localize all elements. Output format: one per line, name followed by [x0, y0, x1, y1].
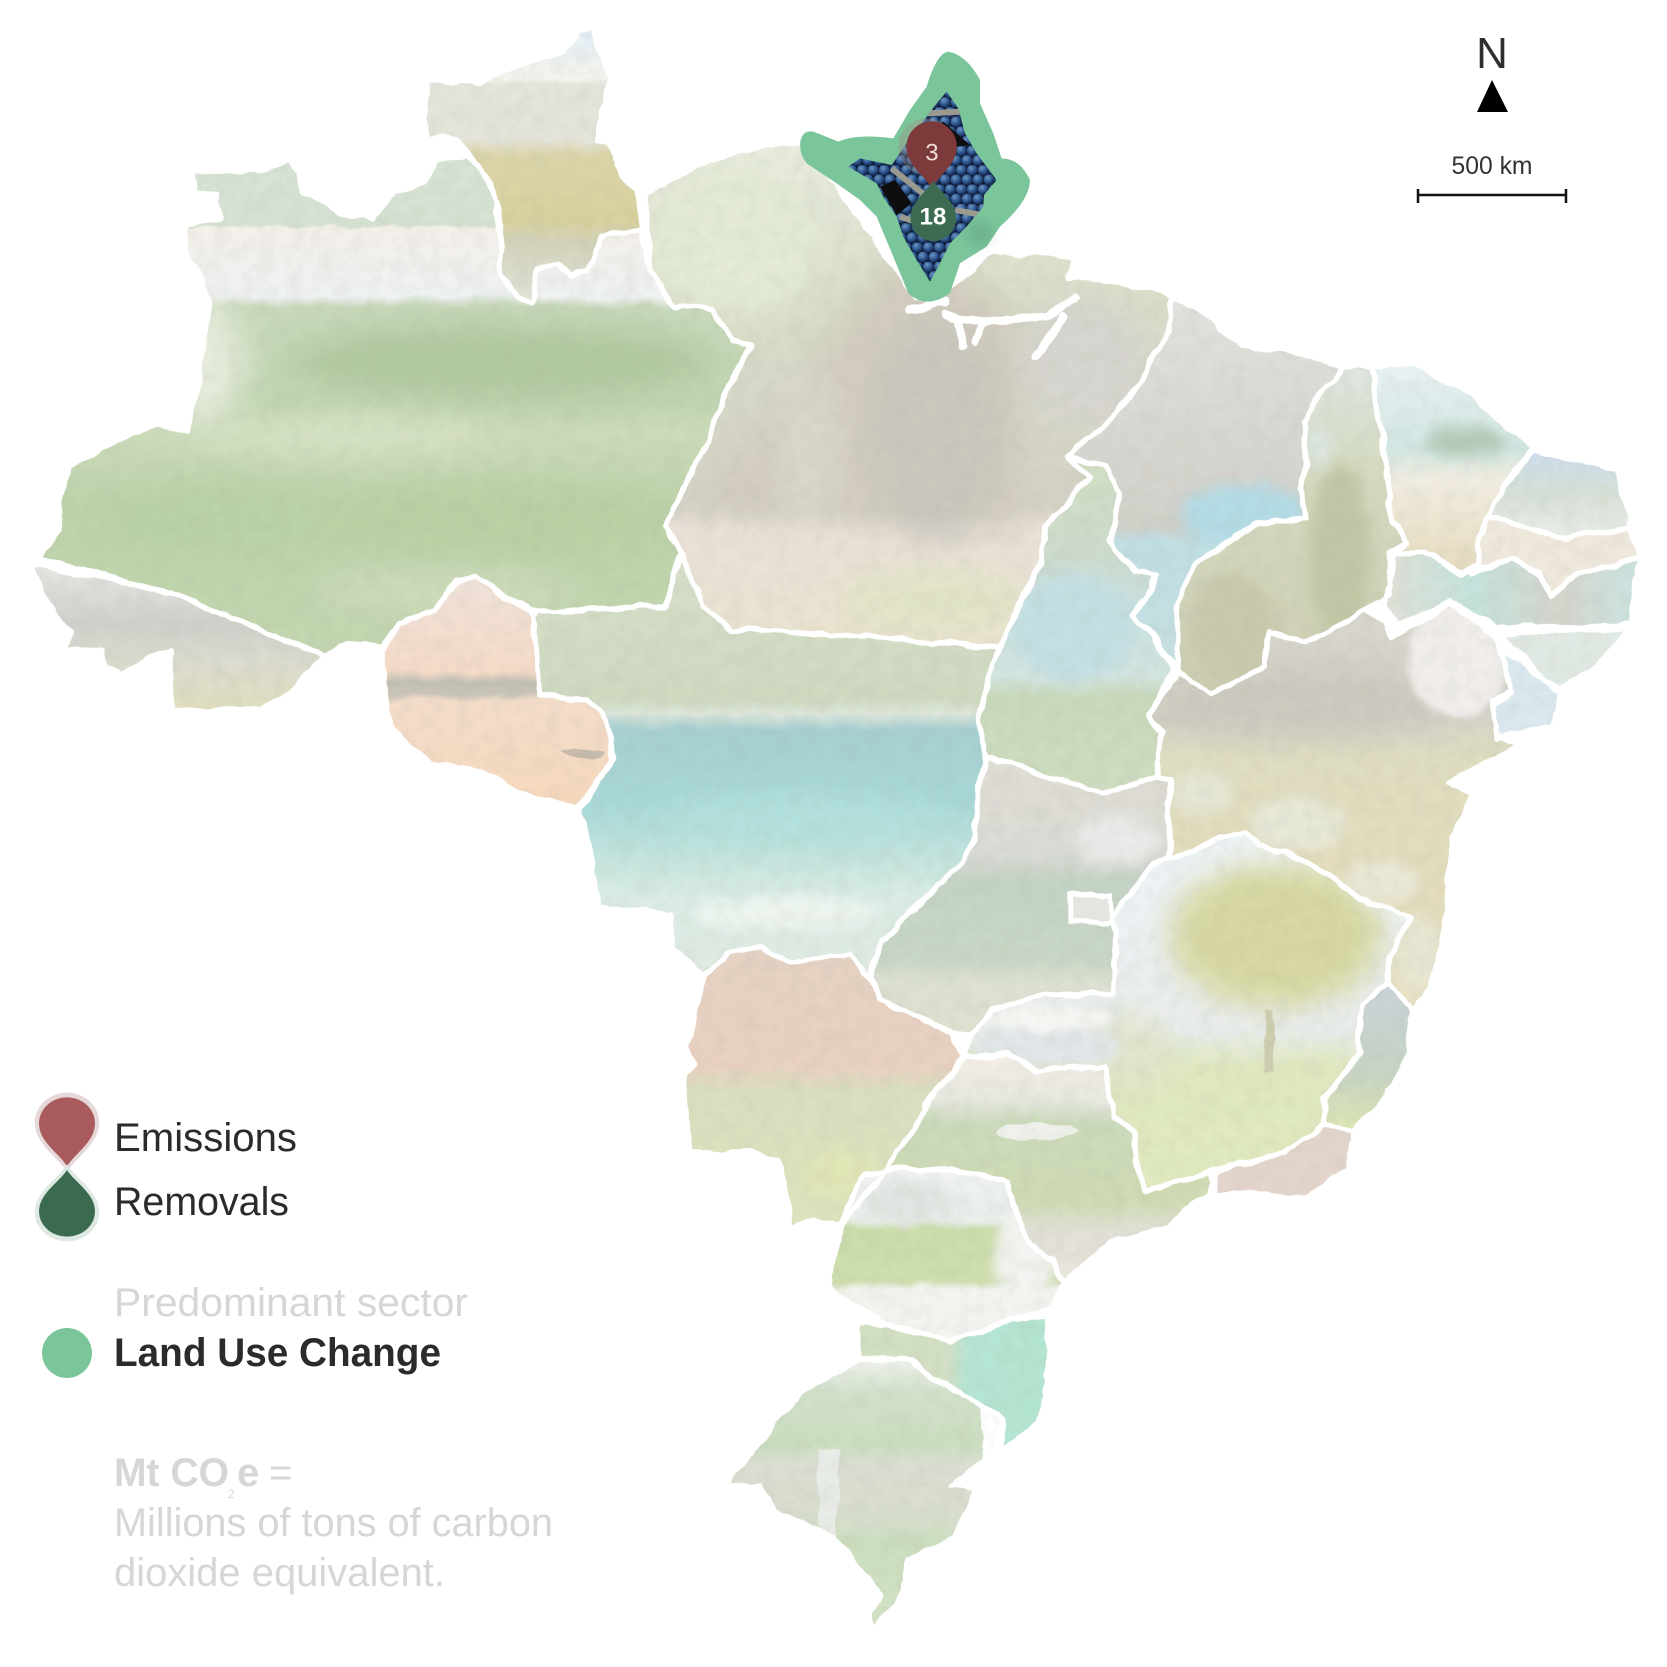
removals marker — [910, 181, 956, 241]
state: Tocantins — [980, 462, 1171, 790]
state: Espirito Santo — [1318, 978, 1419, 1137]
north arrow — [1476, 29, 1508, 112]
state: Bahia — [1152, 606, 1514, 1006]
legend: land use change: Land Use Change — [114, 1331, 441, 1375]
state: Mato Grosso — [532, 547, 1005, 978]
note: Mt CO2e definition: 2 — [228, 1487, 235, 1501]
state: Roraima — [426, 30, 640, 300]
river mouth lines — [909, 240, 1076, 356]
state: Paraiba — [1480, 520, 1637, 592]
emissions marker: 3 — [925, 139, 939, 166]
state: Rondonia — [384, 579, 610, 805]
state: Rio de Janeiro — [1207, 1116, 1361, 1201]
state: Amazonas — [42, 158, 746, 654]
state: Alagoas — [1506, 631, 1624, 686]
state: Goias — [874, 760, 1168, 1032]
note: Mt CO2e definition: dioxide equivalent. — [114, 1551, 445, 1595]
state: Maranhao — [1073, 301, 1338, 660]
state: Piaui — [1179, 368, 1402, 692]
state: Santa Catarina — [850, 1313, 1052, 1456]
state: Parana — [824, 1164, 1068, 1345]
state: Pernambuco — [1386, 554, 1638, 626]
legend: emissions: Emissions — [114, 1116, 297, 1160]
state: Ceara — [1376, 365, 1530, 570]
state: Minas Gerais — [957, 829, 1419, 1196]
state: Para — [638, 138, 1180, 654]
north arrow: N — [1476, 29, 1508, 78]
state: Rio Grande do Norte — [1492, 453, 1628, 536]
state: Sao Paulo — [877, 1050, 1222, 1284]
scale bar — [1418, 153, 1566, 203]
note: Mt CO2e definition: Mt CO — [114, 1451, 229, 1495]
state: Acre — [34, 566, 320, 710]
note: Mt CO2e definition: Millions of tons of carbon — [114, 1501, 553, 1545]
legend: removals: Removals — [114, 1180, 289, 1224]
note: Mt CO2e definition: e — [237, 1451, 259, 1495]
legend: predominant sector heading: Predominant sector — [114, 1281, 468, 1325]
marker shadow — [967, 220, 993, 247]
legend: removals — [35, 1164, 289, 1241]
state: Rio Grande do Sul — [721, 1355, 981, 1637]
state: Sergipe — [1496, 655, 1557, 734]
land use change halo — [800, 52, 1030, 302]
emissions marker — [898, 118, 957, 188]
acai photo — [843, 87, 1003, 287]
scale bar: 500 km — [1452, 153, 1532, 180]
legend: emissions — [35, 1093, 297, 1172]
highlighted state: Amapa — [800, 52, 1030, 302]
note: Mt CO2e definition — [114, 1451, 553, 1595]
removals marker: 18 — [920, 204, 946, 231]
note: Mt CO2e definition: = — [269, 1451, 292, 1495]
Federal District box — [1072, 895, 1111, 923]
state: Mato Grosso do Sul — [680, 944, 967, 1231]
